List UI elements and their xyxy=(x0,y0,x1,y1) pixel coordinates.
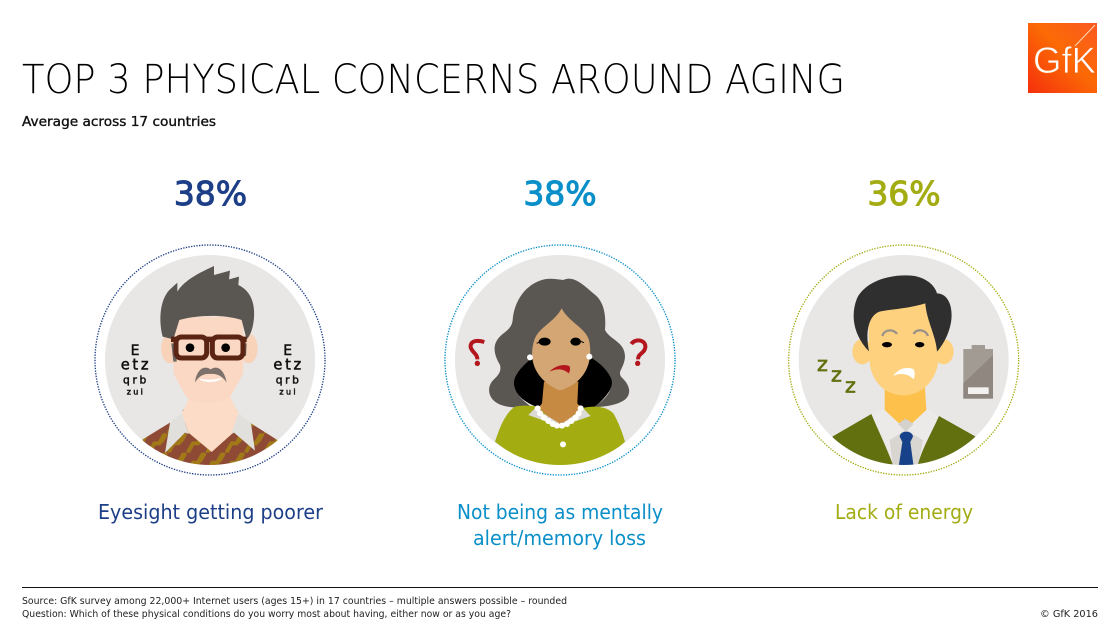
stat: eyesight: 38% xyxy=(174,174,247,213)
icon: man with poor eyesight: etz xyxy=(121,357,151,374)
stat: energy: 36% xyxy=(867,174,941,213)
stat: mental: 38% xyxy=(523,174,597,213)
icon: tired man xyxy=(789,245,1019,475)
subtitle: Average across 17 countries xyxy=(22,115,216,130)
label: energy: Lack of energy xyxy=(835,500,973,524)
icon: tired man: z xyxy=(845,373,856,397)
title: TOP 3 PHYSICAL CONCERNS AROUND AGING xyxy=(22,57,845,103)
icon: man with poor eyesight: etz xyxy=(273,357,304,374)
label: eyesight: Eyesight getting poorer xyxy=(98,500,324,524)
icon: man with poor eyesight: zui xyxy=(279,387,298,396)
GfK logo: GfK xyxy=(1033,40,1096,81)
icon: man with poor eyesight: qrb xyxy=(276,373,302,386)
icon: woman with memory loss xyxy=(445,245,675,475)
footer: copyright: © GfK 2016 xyxy=(1040,609,1098,620)
icon: man with poor eyesight: E xyxy=(131,343,139,359)
footer: source and question xyxy=(22,596,567,620)
icon: man with poor eyesight: E xyxy=(283,343,292,359)
label: mental alertness: Not being as mentally xyxy=(457,500,663,524)
icon: tired man: z xyxy=(831,363,842,387)
GfK logo xyxy=(1028,23,1097,93)
icon: tired man: z xyxy=(817,352,828,376)
footer: source and question: Source: GfK survey among 22,000+ Internet users (ages 15+) in 17 countries – multiple answers possible – rounded xyxy=(22,596,567,607)
label: mental alertness: alert/memory loss xyxy=(473,526,646,550)
icon: man with poor eyesight: qrb xyxy=(123,373,149,386)
label: mental alertness xyxy=(457,500,663,550)
icon: man with poor eyesight: zui xyxy=(127,387,145,396)
icon: man with poor eyesight xyxy=(95,245,325,475)
footer: source and question: Question: Which of these physical conditions do you worry most about having, either now or as you age? xyxy=(22,609,511,620)
